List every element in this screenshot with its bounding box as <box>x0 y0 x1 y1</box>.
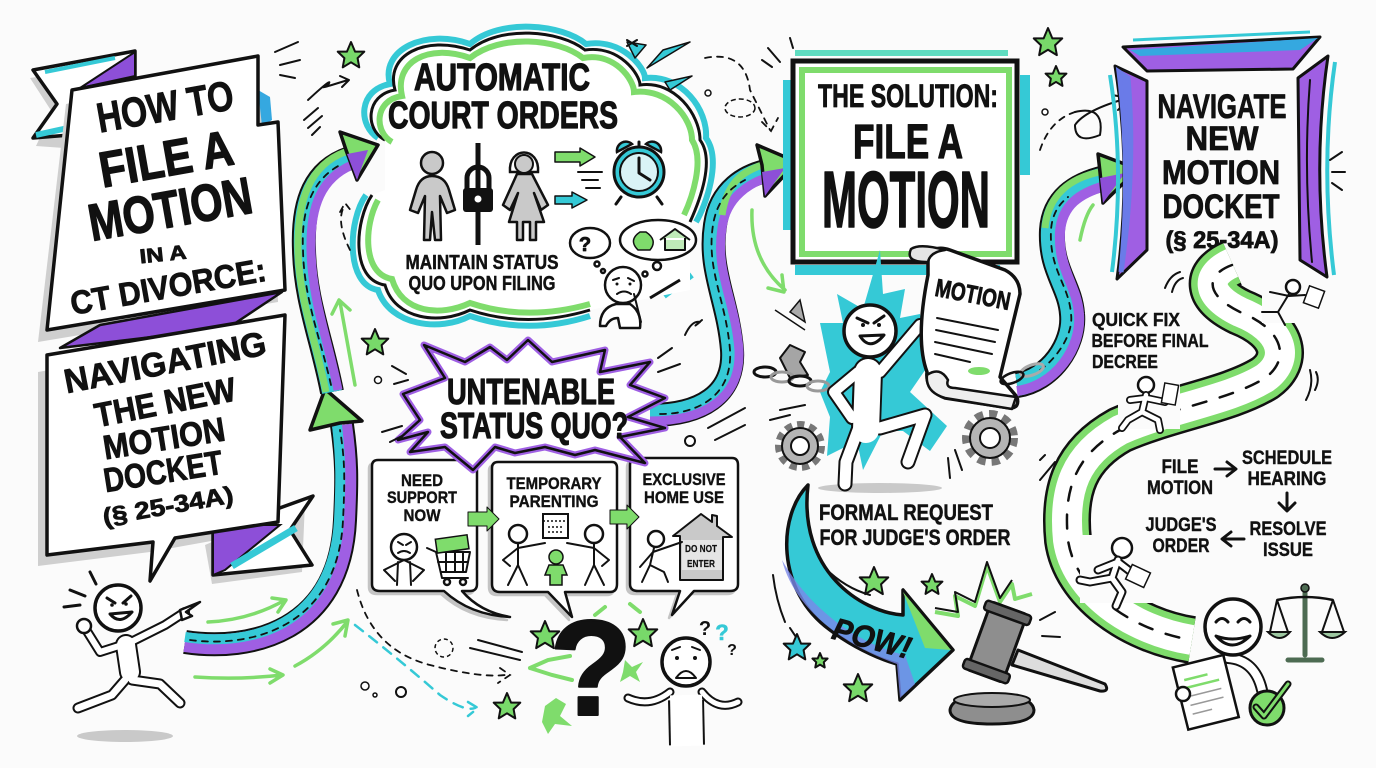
flow: motion process steps <box>1142 448 1332 561</box>
heading line: file a: FILE A <box>95 120 238 198</box>
step: judge's order: JUDGE'S <box>1146 515 1216 536</box>
figure: child <box>545 550 567 585</box>
figure: runner one <box>1262 280 1325 325</box>
step: file motion <box>1142 450 1220 499</box>
caption: quick fix <box>1092 310 1209 372</box>
icon: man <box>410 152 455 240</box>
caption: quo upon filing: QUO UPON FILING <box>408 273 556 295</box>
label: need support now: NEED <box>401 471 443 490</box>
arrow: lower flow ribbon <box>185 389 362 644</box>
illustration: teal burst behind hero <box>820 250 947 470</box>
thought bubble: question: ? <box>579 234 591 256</box>
arrow: to resolve <box>1279 493 1295 511</box>
figure: confused shrugging person: ? <box>715 620 729 645</box>
figure: runner three <box>1080 535 1152 606</box>
caption: quick fix: DECREE <box>1092 352 1158 372</box>
road: winding path <box>1040 263 1318 640</box>
heading: file a: FILE A <box>853 116 963 169</box>
label: temporary parenting <box>506 474 602 511</box>
step: resolve issue <box>1250 519 1326 561</box>
step: file motion: FILE <box>1162 457 1198 478</box>
arrow: pow <box>773 485 953 700</box>
arrow: panel connector two <box>610 505 639 529</box>
heading: motion: MOTION <box>1162 154 1280 192</box>
icon: stars around pow <box>784 567 942 701</box>
subtitle line: the new: THE NEW <box>91 371 240 435</box>
step: judge's order <box>1146 515 1216 557</box>
heading: automatic: AUTOMATIC <box>414 57 590 99</box>
figure: confused shrugging person: ? <box>727 642 737 659</box>
arrow: to schedule <box>1215 462 1236 476</box>
figure: worried person <box>600 267 641 328</box>
caption: formal request <box>819 500 1011 550</box>
pow label: POW! <box>829 611 915 666</box>
icon: house <box>673 514 732 580</box>
label: temporary parenting: TEMPORARY <box>506 474 602 493</box>
step: file motion: MOTION <box>1147 478 1213 499</box>
step: schedule hearing: HEARING <box>1248 469 1326 490</box>
arrow: teal <box>555 192 587 208</box>
arrow: upper flow ribbon <box>298 132 378 392</box>
caption: formal request: FOR JUDGE'S ORDER <box>820 525 1011 550</box>
heading line: motion: MOTION <box>84 167 257 253</box>
figure: confused shrugging person: ? <box>699 618 711 640</box>
connector fold between banners <box>60 292 282 348</box>
label: need support now: NOW <box>404 506 441 525</box>
figure: runner two <box>1118 375 1180 430</box>
arrow: flow ribbon to navigate <box>999 154 1138 391</box>
panel: the solution box <box>788 53 1025 270</box>
caption: quick fix: BEFORE FINAL <box>1092 331 1209 351</box>
panel: need support now <box>372 460 510 617</box>
heading: motion: MOTION <box>822 155 990 244</box>
thought bubble: money and house <box>620 220 696 276</box>
arrow: green motion accents <box>195 300 355 683</box>
figure: running person pointing <box>64 572 200 742</box>
icon: lock on barrier <box>463 143 493 245</box>
icon: broken gears and chains <box>754 300 1014 478</box>
subtitle line: statute: (§ 25-34A) <box>101 482 235 531</box>
heading: new: NEW <box>1186 120 1259 158</box>
label: need support now: SUPPORT <box>387 488 458 507</box>
icon: stars near question mark <box>338 28 1066 718</box>
arrow: panel connector one <box>468 507 499 531</box>
icon: house: ENTER <box>687 559 716 570</box>
heading: navigate: NAVIGATE <box>1158 88 1286 126</box>
panel: temporary parenting <box>492 462 617 617</box>
icon: gavel <box>950 600 1107 724</box>
thought bubble: question <box>570 228 610 273</box>
icon: check badge <box>1250 684 1288 725</box>
heading: untenable: UNTENABLE <box>447 371 615 412</box>
step: schedule hearing <box>1242 448 1332 490</box>
subtitle line: docket: DOCKET <box>101 444 226 500</box>
icon: cart of money <box>427 535 470 585</box>
figure: happy person with document <box>1173 599 1288 730</box>
label: temporary parenting: PARENTING <box>510 492 598 511</box>
icon: motion scroll <box>910 246 1020 409</box>
arrow: to judge's order <box>1222 532 1244 546</box>
figure: triumphant person <box>818 305 942 493</box>
heading: the solution: THE SOLUTION: <box>818 78 998 114</box>
heading line: ct divorce: CT DIVORCE: <box>67 251 269 322</box>
icon: house: DO NOT <box>685 544 717 555</box>
icon: scales of justice <box>1268 584 1345 660</box>
step: resolve issue: RESOLVE <box>1250 519 1326 540</box>
label: exclusive home use: EXCLUSIVE <box>642 470 726 489</box>
heading: court orders: COURT ORDERS <box>388 95 618 137</box>
icon: woman <box>503 152 548 240</box>
icon: alarm clock <box>578 142 664 204</box>
step: schedule hearing: SCHEDULE <box>1242 448 1332 469</box>
heading line: how to: HOW TO <box>93 71 237 142</box>
arrow: middle flow ribbon <box>650 145 797 421</box>
heading line: in a: IN A <box>139 242 188 268</box>
step: resolve issue: ISSUE <box>1263 540 1313 561</box>
arrow: green <box>555 148 595 166</box>
step: judge's order: ORDER <box>1152 536 1210 557</box>
label: need support now <box>387 471 458 525</box>
label: exclusive home use <box>642 470 726 507</box>
subtitle banner: navigating the new motion docket <box>38 315 313 584</box>
panel: automatic court orders cloud <box>353 27 713 328</box>
doodles: dashed swirl arrows and dots <box>275 38 1129 716</box>
icon: calendar <box>543 514 568 538</box>
figure: confused shrugging person <box>628 618 738 746</box>
icon: impact sparks <box>935 562 1032 616</box>
figure: angry person <box>384 534 424 585</box>
panel: exclusive home use <box>630 458 738 615</box>
caption: formal request: FORMAL REQUEST <box>819 500 993 525</box>
label: exclusive home use: HOME USE <box>644 488 724 507</box>
icon: document <box>1173 655 1239 730</box>
figure: blocking person <box>640 531 682 582</box>
icon: big question mark with sparks: ? <box>549 592 633 744</box>
heading: status quo: STATUS QUO? <box>440 405 628 446</box>
title banner: how to file a motion <box>30 51 285 342</box>
subtitle line: navigating: NAVIGATING <box>61 325 269 401</box>
panel: untenable status quo burst <box>398 340 665 470</box>
heading: docket: DOCKET <box>1162 188 1280 226</box>
panel: navigate docket doorway <box>1110 32 1345 279</box>
caption: maintain status: MAINTAIN STATUS <box>406 252 558 274</box>
scroll label: MOTION <box>933 274 1013 316</box>
subtitle line: motion: MOTION <box>100 411 228 467</box>
caption: quick fix: QUICK FIX <box>1092 310 1180 330</box>
figure: parent left <box>503 525 545 585</box>
heading: statute: (§ 25-34A) <box>1166 227 1278 254</box>
figure: parent right <box>567 525 609 585</box>
